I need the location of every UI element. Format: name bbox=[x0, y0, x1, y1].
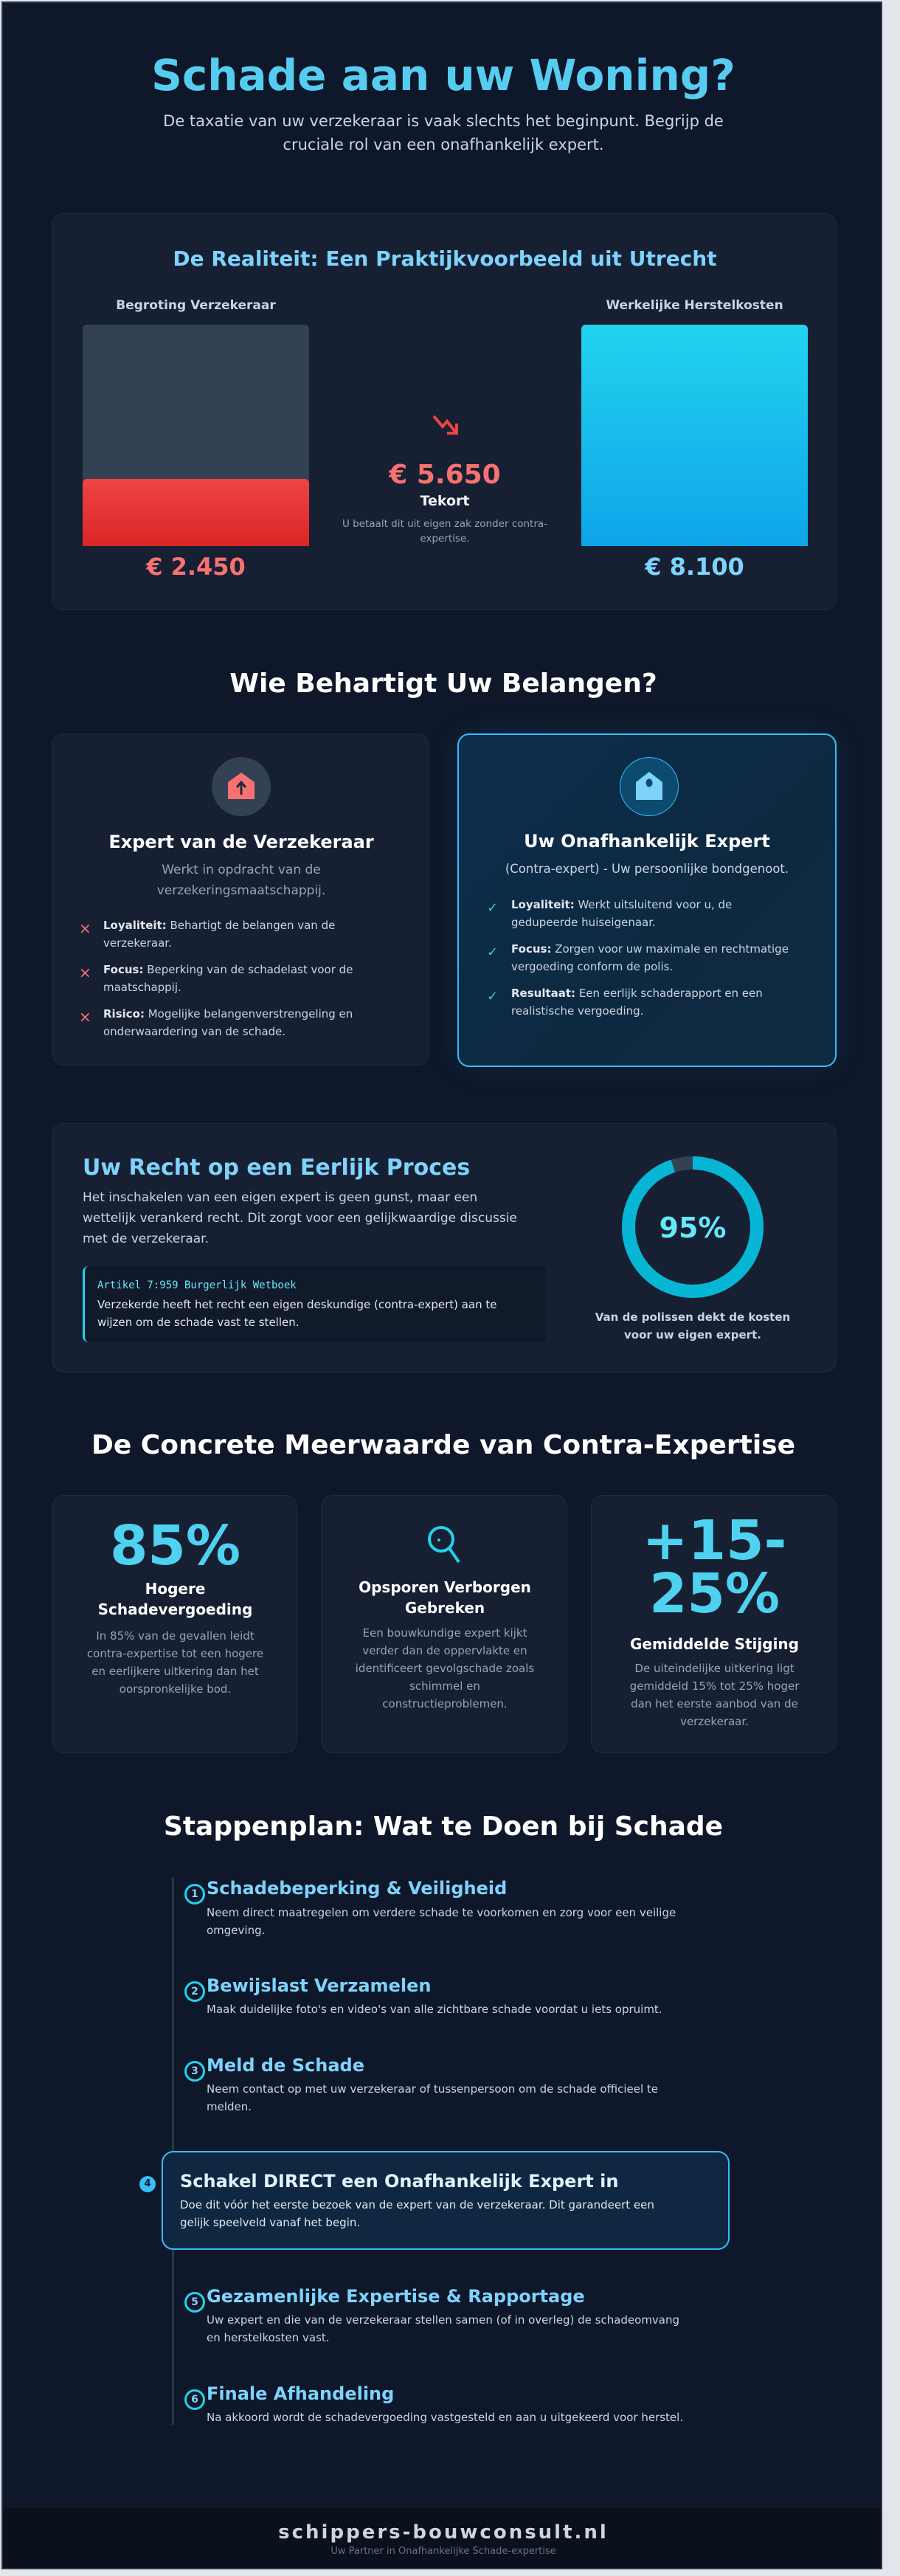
step 3 bbox=[184, 2055, 658, 2113]
value: 2.450: € 2.450 bbox=[146, 553, 246, 581]
heading: meerwaarde: De Concrete Meerwaarde van Contra-Expertise bbox=[91, 1430, 795, 1460]
step 5: en herstelkosten vast. bbox=[207, 2331, 330, 2344]
label: begroting: Begroting Verzekeraar bbox=[116, 298, 276, 313]
step 5: Uw expert en die van de verzekeraar stellen samen (of in overleg) de schadeomvang bbox=[207, 2313, 679, 2327]
card: +15-25% bbox=[591, 1495, 837, 1753]
list: positives: ✓ bbox=[487, 989, 498, 1004]
step 5 bbox=[184, 2286, 679, 2344]
icon: house blue bbox=[620, 757, 679, 816]
list: negatives: Loyaliteit: Behartigt de belangen van de verzekeraar. bbox=[103, 919, 335, 950]
step 2: Maak duidelijke foto's en video's van alle zichtbare schade voordat u iets opruimt. bbox=[207, 2003, 662, 2016]
icon: magnifier bbox=[428, 1526, 460, 1563]
subtitle bbox=[163, 112, 724, 153]
footer bbox=[3, 2508, 884, 2575]
paragraph: wettelijk verankerd recht. Dit zorgt voor een gelijkwaardige discussie bbox=[83, 1211, 517, 1226]
list: positives: ✓ bbox=[487, 945, 498, 960]
step 6 bbox=[184, 2383, 683, 2424]
step 5: Gezamenlijke Expertise & Rapportage bbox=[207, 2286, 585, 2307]
list: negatives: × bbox=[79, 964, 91, 981]
timeline bbox=[139, 1877, 730, 2425]
card text: Een bouwkundige expert kijkt verder dan de oppervlakte en identificeert gevolgschade zoals schimmel en bbox=[356, 1626, 534, 1693]
step 3: 3 bbox=[191, 2065, 198, 2077]
paragraph: Het inschakelen van een eigen expert is geen gunst, maar een bbox=[83, 1190, 477, 1205]
panel heading: De Realiteit: Een Praktijkvoorbeeld uit Utrecht bbox=[173, 246, 717, 271]
card: verborgen gebreken bbox=[321, 1495, 567, 1753]
icon: trend down arrow bbox=[432, 415, 458, 435]
bar: werkelijke bbox=[581, 325, 808, 546]
quote: artikel: wijzen om de schade vast te stellen. bbox=[97, 1316, 300, 1329]
panel heading: Uw Recht op een Eerlijk Proces bbox=[83, 1155, 470, 1181]
list: positives: Loyaliteit: Werkt uitsluitend voor u, de bbox=[511, 898, 732, 911]
list: negatives: Risico: Mogelijke belangenverstrengeling en onderwaardering van de schade. bbox=[103, 1007, 353, 1038]
label: tekort: Tekort bbox=[420, 493, 469, 509]
list: positives: ✓ bbox=[487, 900, 498, 916]
step 2: 2 bbox=[191, 1986, 198, 1997]
note: tekort: U betaalt dit uit eigen zak zonder contra-expertise. bbox=[342, 518, 547, 545]
step 4 highlighted bbox=[139, 2151, 730, 2250]
footer tagline: Uw Partner in Onafhankelijke Schade-expertise bbox=[330, 2546, 556, 2557]
step 4 highlighted: gelijk speelveld vanaf het begin. bbox=[180, 2216, 360, 2229]
card text: De uiteindelijke uitkering ligt gemiddeld 15% tot 25% hoger dan het eerste aanbod van de verzekeraar. bbox=[630, 1662, 799, 1728]
value: tekort: € 5.650 bbox=[389, 460, 501, 490]
title: Schade aan uw Woning? bbox=[151, 50, 735, 100]
quote: artikel: Verzekerde heeft het recht een eigen deskundige (contra-expert) aan te bbox=[97, 1298, 497, 1311]
chart: donut 95%: 95% bbox=[660, 1212, 726, 1244]
step 2 bbox=[184, 1975, 662, 2016]
subtitle: cruciale rol van een onafhankelijk expert. bbox=[283, 136, 604, 153]
panel: realiteit bbox=[52, 213, 837, 610]
step 3: Neem contact op met uw verzekeraar of tussenpersoon om de schade officieel te bbox=[207, 2082, 658, 2096]
stat: 85% bbox=[110, 1514, 240, 1578]
value: 8.100: € 8.100 bbox=[645, 553, 744, 581]
quote: artikel: Artikel 7:959 Burgerlijk Wetboek bbox=[97, 1280, 297, 1291]
heading: wie behartigt: Wie Behartigt Uw Belangen? bbox=[229, 669, 657, 699]
stat: 25% bbox=[649, 1562, 780, 1626]
step 1: Schadebeperking & Veiligheid bbox=[207, 1878, 507, 1899]
list: negatives: Focus: Beperking van de schadelast voor de maatschappij. bbox=[103, 963, 353, 994]
card title: Gemiddelde Stijging bbox=[630, 1635, 799, 1653]
step 1: Neem direct maatregelen om verdere schade te voorkomen en zorg voor een veilige omgeving. bbox=[207, 1906, 676, 1937]
card title: Hogere Schadevergoeding bbox=[98, 1580, 252, 1618]
list: positives bbox=[487, 898, 789, 1018]
card text: constructieproblemen. bbox=[382, 1697, 508, 1710]
panel: onafhankelijk expert bbox=[457, 733, 837, 1067]
list: positives: Resultaat: Een eerlijk schaderapport en een realistische vergoeding. bbox=[511, 987, 763, 1018]
bar: begroting bbox=[83, 325, 309, 546]
step 1: 1 bbox=[191, 1888, 198, 1900]
card subtitle: (Contra-expert) - Uw persoonlijke bondgenoot. bbox=[505, 862, 789, 876]
step 6: Finale Afhandeling bbox=[207, 2383, 394, 2404]
footer brand: schippers-bouwconsult.nl bbox=[278, 2521, 609, 2544]
list: negatives: × bbox=[79, 1008, 91, 1026]
list: negatives: × bbox=[79, 919, 91, 937]
label: werkelijke: Werkelijke Herstelkosten bbox=[606, 298, 783, 313]
paragraph bbox=[83, 1190, 517, 1246]
step 3: melden. bbox=[207, 2100, 252, 2113]
step 6: Na akkoord wordt de schadevergoeding vastgesteld en aan u uitgekeerd voor herstel. bbox=[207, 2411, 683, 2424]
subtitle: De taxatie van uw verzekeraar is vaak slechts het beginpunt. Begrijp de bbox=[163, 112, 724, 130]
card text: In 85% van de gevallen leidt contra‑expertise tot een hogere en eerlijkere uitkering dan het oorspronkelijke bod. bbox=[87, 1629, 263, 1696]
quote: artikel bbox=[83, 1266, 546, 1342]
list: positives: Focus: Zorgen voor uw maximale en rechtmatige vergoeding conform de polis. bbox=[511, 942, 789, 973]
card title: Expert van de Verzekeraar bbox=[108, 832, 374, 852]
card: 85% bbox=[52, 1495, 297, 1753]
caption: donut: Van de polissen dekt de kosten voor uw eigen expert. bbox=[595, 1311, 790, 1341]
step 6: 6 bbox=[191, 2394, 198, 2406]
step 4 highlighted: Schakel DIRECT een Onafhankelijk Expert in bbox=[180, 2171, 618, 2192]
card subtitle: Werkt in opdracht van de verzekeringsmaatschappij. bbox=[157, 863, 325, 898]
paragraph: met de verzekeraar. bbox=[83, 1232, 209, 1246]
card title: Opsporen Verborgen Gebreken bbox=[359, 1578, 531, 1617]
icon: house red bbox=[212, 757, 271, 816]
step 3: Meld de Schade bbox=[207, 2055, 364, 2076]
step 5: 5 bbox=[191, 2296, 198, 2308]
list: negatives bbox=[79, 919, 353, 1038]
heading: stappenplan: Stappenplan: Wat te Doen bij Schade bbox=[164, 1812, 723, 1842]
step 4 highlighted: Doe dit vóór het eerste bezoek van de expert van de verzekeraar. Dit garandeert een bbox=[180, 2198, 654, 2211]
list: positives: gedupeerde huiseigenaar. bbox=[511, 916, 656, 929]
stat: +15- bbox=[643, 1509, 786, 1572]
panel: recht bbox=[52, 1123, 837, 1372]
chart: donut 95% bbox=[622, 1156, 764, 1298]
step 2: Bewijslast Verzamelen bbox=[207, 1975, 431, 1996]
step 1 bbox=[184, 1878, 676, 1937]
card title: Uw Onafhankelijk Expert bbox=[524, 831, 770, 852]
step 4 highlighted: 4 bbox=[144, 2178, 151, 2189]
panel: expert verzekeraar bbox=[52, 733, 429, 1066]
stat bbox=[643, 1509, 786, 1626]
